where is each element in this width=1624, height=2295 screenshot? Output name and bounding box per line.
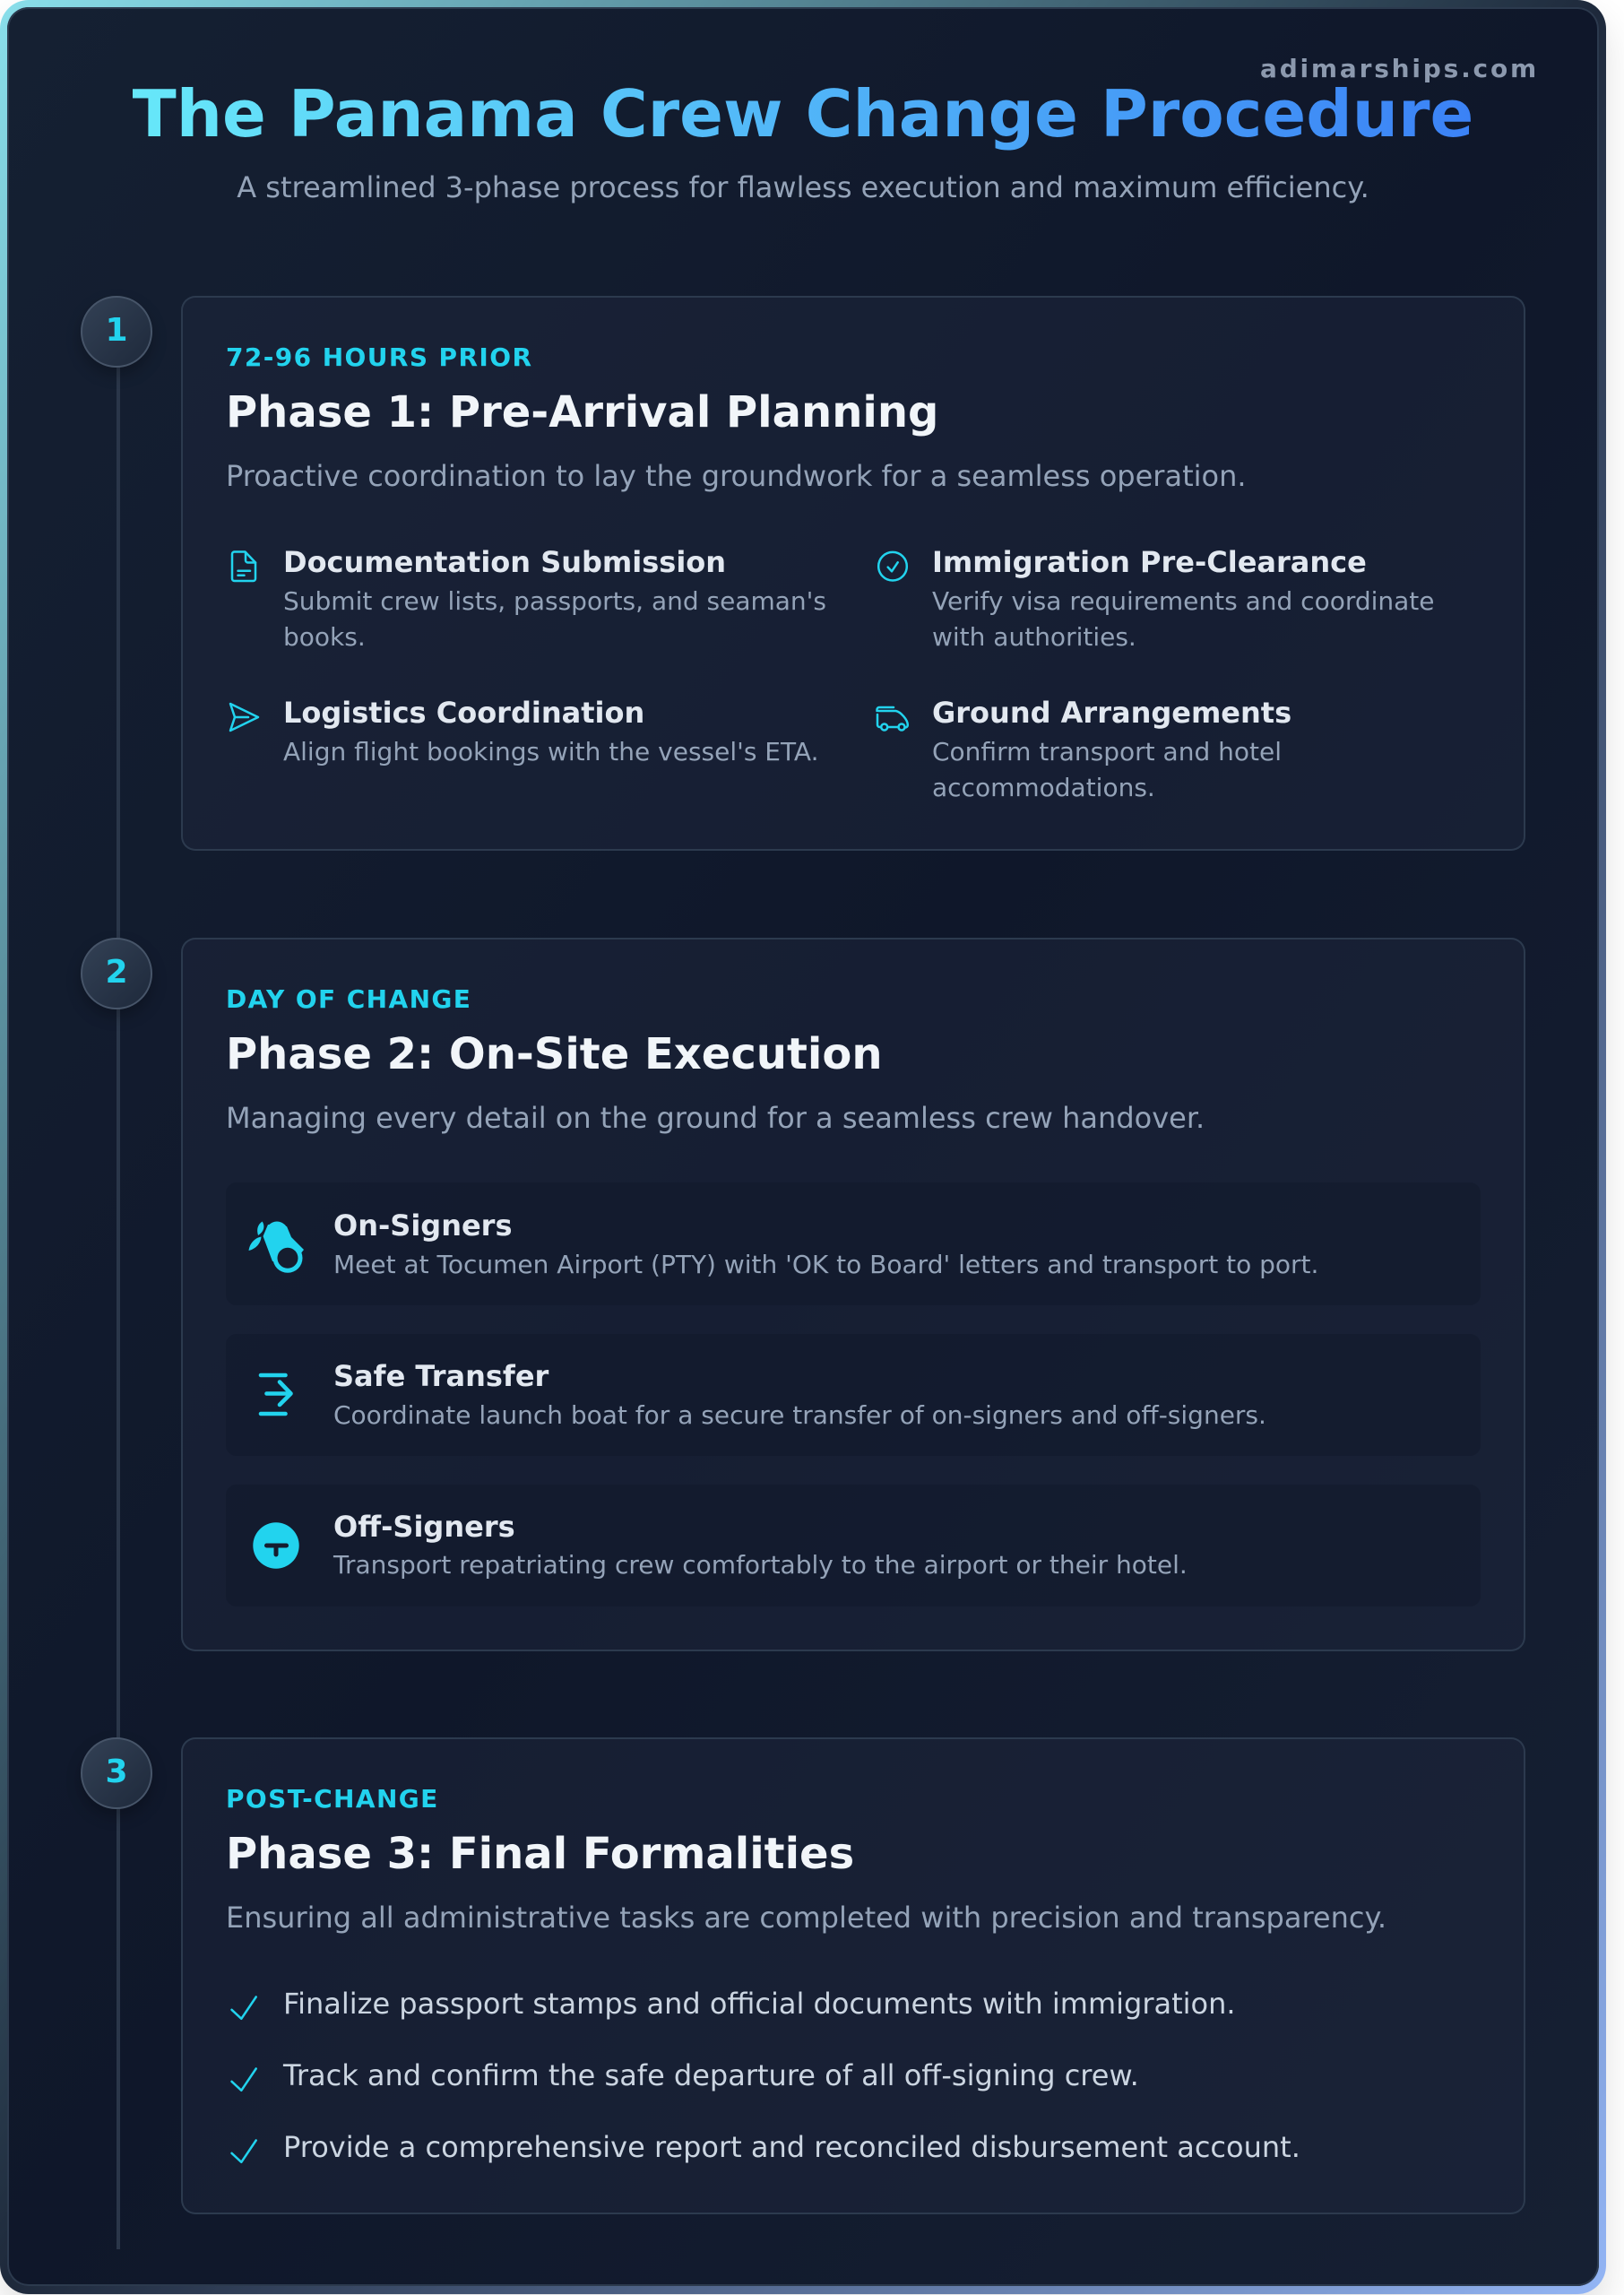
item description: books. xyxy=(283,622,366,652)
title: The Panama Crew Change Procedure xyxy=(133,76,1473,152)
timeline marker 3: 3 xyxy=(105,1754,128,1790)
step description: Coordinate launch boat for a secure transfer of on-signers and off-signers. xyxy=(333,1400,1266,1430)
item description: accommodations. xyxy=(932,773,1155,802)
panel: phase 3 xyxy=(181,1737,1525,2214)
item description xyxy=(283,586,826,652)
icon: check xyxy=(230,1996,257,2021)
item description: with authorities. xyxy=(932,622,1136,652)
watermark: website: adimarships.com xyxy=(1260,54,1539,83)
icon: document xyxy=(231,550,256,583)
panel: phase 1 xyxy=(181,296,1525,851)
item title: Documentation Submission xyxy=(283,545,726,579)
phase 2 heading: Phase 2: On-Site Execution xyxy=(226,1029,882,1079)
checklist item 1 xyxy=(230,1987,1236,2021)
checklist text: Finalize passport stamps and official documents with immigration. xyxy=(283,1987,1236,2021)
phase 1 description: Proactive coordination to lay the groundwork for a seamless operation. xyxy=(226,459,1247,493)
item description: Confirm transport and hotel xyxy=(932,737,1282,766)
phase 1 tag: 72-96 HOURS PRIOR xyxy=(226,342,532,372)
item: documentation submission xyxy=(231,545,826,652)
step title: Off-Signers xyxy=(333,1510,515,1544)
item title: Logistics Coordination xyxy=(283,696,644,730)
step title: Safe Transfer xyxy=(333,1359,549,1393)
item: ground arrangements xyxy=(876,696,1291,802)
item: logistics coordination xyxy=(229,696,819,766)
timeline marker 2: 2 xyxy=(105,954,128,991)
phase 3 heading: Phase 3: Final Formalities xyxy=(226,1829,854,1879)
icon: send plane xyxy=(229,703,260,732)
step: off-signers xyxy=(226,1485,1481,1606)
phase 3 description: Ensuring all administrative tasks are completed with precision and transparency. xyxy=(226,1901,1386,1935)
phase 2 description: Managing every detail on the ground for a seamless crew handover. xyxy=(226,1101,1205,1135)
step description: Meet at Tocumen Airport (PTY) with 'OK to Board' letters and transport to port. xyxy=(333,1250,1318,1279)
item description: Align flight bookings with the vessel's ETA. xyxy=(283,737,819,766)
checklist text: Track and confirm the safe departure of all off-signing crew. xyxy=(283,2058,1139,2092)
phase 2 tag: DAY OF CHANGE xyxy=(226,984,471,1014)
panel: phase 2 xyxy=(181,938,1525,1651)
step title: On-Signers xyxy=(333,1208,513,1243)
timeline marker 1 xyxy=(81,296,152,368)
step: safe transfer xyxy=(226,1334,1481,1456)
item description xyxy=(932,586,1435,652)
icon: check circle xyxy=(877,550,909,582)
icon: check xyxy=(230,2067,257,2092)
icon: off-signers xyxy=(253,1522,299,1569)
icon: van xyxy=(876,706,909,732)
timeline vertical line xyxy=(117,332,120,2249)
icon: transfer arrow xyxy=(258,1373,293,1416)
timeline marker 2 xyxy=(81,938,152,1009)
item title: Immigration Pre-Clearance xyxy=(932,545,1367,579)
item description: Submit crew lists, passports, and seaman's xyxy=(283,586,826,616)
item description: Verify visa requirements and coordinate xyxy=(932,586,1435,616)
icon: check xyxy=(230,2139,257,2164)
step description: Transport repatriating crew comfortably to the airport or their hotel. xyxy=(333,1550,1188,1580)
phase 3 tag: POST-CHANGE xyxy=(226,1784,439,1814)
subtitle: A streamlined 3-phase process for flawless execution and maximum efficiency. xyxy=(237,170,1369,204)
timeline marker 3 xyxy=(81,1737,152,1809)
item: immigration pre-clearance xyxy=(877,545,1435,652)
checklist item 3 xyxy=(230,2130,1300,2164)
phase 1 heading: Phase 1: Pre-Arrival Planning xyxy=(226,387,938,437)
item title: Ground Arrangements xyxy=(932,696,1291,730)
icon: on-signers xyxy=(249,1221,304,1273)
timeline marker 1: 1 xyxy=(105,312,128,349)
checklist text: Provide a comprehensive report and reconciled disbursement account. xyxy=(283,2130,1300,2164)
step: on-signers xyxy=(226,1182,1481,1305)
item description xyxy=(932,737,1282,802)
checklist item 2 xyxy=(230,2058,1139,2092)
